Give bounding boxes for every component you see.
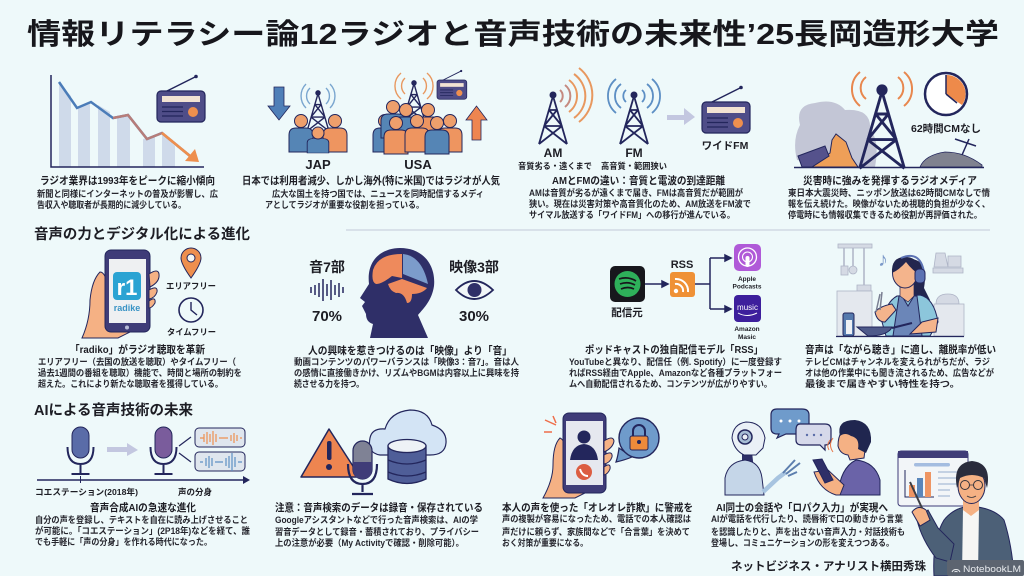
label: area free: エリアフリー xyxy=(166,281,216,291)
body text xyxy=(805,356,994,389)
arrow: up xyxy=(466,106,487,140)
body text: アとしてラジオが重要な役割を担っている。 xyxy=(265,199,424,210)
body text: 報を伝え続けた。映像がないため視聴的負担が少なく、 xyxy=(788,198,990,209)
body text: AIが電話を代行したり、読唇術で口の動きから言葉 xyxy=(711,513,903,524)
body text: テレビCMはチャンネルを変えられがちだが、ラジ xyxy=(805,356,990,367)
body text: オは他の作業中にも聞き流されるため、広告などが xyxy=(805,367,994,378)
icon: location pin xyxy=(181,248,201,278)
line chart: industry decline xyxy=(51,75,204,167)
icon: phone with hand xyxy=(82,250,159,338)
icon: phone with hand: radike xyxy=(114,303,140,313)
label: Apple Podcasts xyxy=(733,276,762,290)
body text: サイマル放送する「ワイドFM」への移行が進んでいる。 xyxy=(529,209,735,220)
panel: radio decline xyxy=(37,75,218,210)
icon: AM tower xyxy=(539,68,592,144)
illustration: head with brain xyxy=(360,248,434,338)
icon: music note: ♪ xyxy=(878,249,888,271)
body text: 続させる力を持つ。 xyxy=(294,378,364,389)
panel: AI conversation xyxy=(711,409,905,548)
caption: FM: 高音質・範囲狭い xyxy=(601,161,667,171)
body text xyxy=(38,356,242,389)
chart board xyxy=(898,451,968,506)
icon: tower with waves xyxy=(852,72,912,168)
body text: AMは音質が劣るが遠くまで届き、FMは高音質だが範囲が xyxy=(529,187,743,198)
ground line xyxy=(836,336,964,338)
body text xyxy=(711,513,905,548)
icon: microphone blue xyxy=(68,427,94,474)
body text: おく対策が重要になる。 xyxy=(502,537,588,548)
body text: 最後まで届きやすい特性を持つ。 xyxy=(805,378,960,389)
heading: 人の興味を惹きつけるのは「映像」より「音」 xyxy=(308,344,512,357)
icon: Amazon Music: music xyxy=(737,303,758,312)
label: sound 7: 音7部 xyxy=(309,259,345,275)
body text: 東日本大震災時、ニッポン放送は62時間CMなしで情 xyxy=(788,187,990,198)
icon: lock bubble xyxy=(616,418,659,462)
body text: 習音データとして録音・蓄積されており、プライバシー xyxy=(275,526,479,537)
icon: database xyxy=(388,440,426,484)
body text: 声の複製が容易になったため、電話での本人確認は xyxy=(502,513,691,524)
icon: phone with hand: r1 xyxy=(117,275,137,300)
icon: warning triangle xyxy=(301,429,360,477)
icon: waveform xyxy=(311,279,343,301)
label: time free: タイムフリー xyxy=(167,327,216,337)
presenter caption: ネットビジネス・アナリスト横田秀珠 xyxy=(731,559,926,573)
label: JAP: JAP xyxy=(305,157,331,172)
icon: FM tower xyxy=(608,79,660,144)
label: wide FM: ワイドFM xyxy=(702,140,749,152)
title: 情報リテラシー論12ラジオと音声技術の未来性’25長岡造形大学 xyxy=(27,18,999,51)
arrow: down xyxy=(268,87,290,120)
icon: orange waveform xyxy=(195,428,245,447)
panel: Japan vs USA xyxy=(242,70,500,210)
ground line xyxy=(794,166,984,168)
label: USA: USA xyxy=(404,157,432,172)
label: voice avatar: 声の分身 xyxy=(178,487,212,497)
arrows: distribution flow xyxy=(645,255,731,312)
icon: phone with hand xyxy=(543,413,614,498)
body text: 超えた。これにより新たな聴取者を獲得している。 xyxy=(38,378,223,389)
arrow xyxy=(667,108,695,125)
illustration: presenter with board xyxy=(898,451,1014,576)
body text: 過去1週間の番組を聴取）機能で、時間と場所の制約を xyxy=(38,367,242,378)
badge: NotebookLM: NotebookLM xyxy=(963,564,1021,575)
body text: 声だけに頼らず、家族間などで「合言葉」を決めて xyxy=(502,526,690,537)
body text: 停電時にも情報収集できるため役割が再評価された。 xyxy=(788,209,982,220)
body text xyxy=(294,356,519,389)
icon: clock xyxy=(925,73,967,115)
heading: 「radiko」がラジオ聴取を革新 xyxy=(70,343,205,356)
label: 30%: 30% xyxy=(459,308,489,325)
body text: YouTubeと異なり、配信任（例. Spotify）に一度登録す xyxy=(569,356,782,367)
heading: 本人の声を使った「オレオレ詐欺」に警戒を xyxy=(502,501,693,514)
body text: ムへ自動配信されるため、コンテンツが広がりやすい。 xyxy=(569,378,772,389)
body text xyxy=(569,356,782,389)
icon: radio xyxy=(702,86,750,133)
body text: 狭い。現在は災害対策や高音質化のため、AM放送をFM波で xyxy=(529,198,751,209)
illustration: smoke xyxy=(795,102,877,167)
icon: eye xyxy=(456,281,493,299)
body text: ればRSS経由でApple、Amazonなど各種プラットフォー xyxy=(569,367,782,378)
body text: Googleアシスタントなどで行った音声検索は、AIの学 xyxy=(275,514,478,525)
body text: エリアフリー（去国の放送を聴取）やタイムフリー（ xyxy=(38,356,236,367)
icon: Amazon Music xyxy=(734,295,761,322)
icon: Apple Podcasts xyxy=(734,244,761,271)
icon: microphone purple xyxy=(150,427,176,474)
heading: ポッドキャストの独自配信モデル「RSS」 xyxy=(585,343,763,356)
label: AM: AM xyxy=(544,146,562,160)
icon: clock xyxy=(179,298,203,322)
panel: AM and FM xyxy=(518,68,751,220)
label: image 3: 映像3部 xyxy=(449,259,499,275)
arrows: branch xyxy=(179,437,191,462)
icon: Spotify xyxy=(610,266,645,302)
panel: sound vs image xyxy=(294,248,519,389)
heading: 災害時に強みを発揮するラジオメディア xyxy=(803,174,977,187)
divider xyxy=(346,229,990,231)
heading: 注意：音声検索のデータは録音・保存されている xyxy=(275,501,483,514)
body text xyxy=(502,513,691,548)
label: FM: FM xyxy=(625,146,643,160)
heading: ラジオ業界は1993年をピークに縮小傾向 xyxy=(40,174,215,187)
heading: 音声は「ながら聴き」に適し、離脱率が低い xyxy=(805,343,996,356)
label: Amazon Music xyxy=(734,326,760,341)
icon: blue waveform xyxy=(195,452,245,471)
icon: microphone xyxy=(348,441,377,494)
illustration: kitchen background xyxy=(837,244,964,336)
panel: listening while cooking xyxy=(805,244,996,389)
label: 70%: 70% xyxy=(312,308,342,325)
timeline xyxy=(37,476,250,484)
label: Amazon Music: Amazon xyxy=(734,326,760,333)
body text xyxy=(529,187,751,220)
illustration: woman cooking xyxy=(843,256,938,336)
heading: AI同士の会話や「ロパク入力」が実現へ xyxy=(716,501,888,514)
body text: 広大な国土を持つ国では、ニュースを同時配信するメディ xyxy=(272,188,484,199)
body text: でも手軽に「声の分身」を作れる時代になった。 xyxy=(35,536,212,547)
label: source: 配信元 xyxy=(611,306,643,319)
body text: 動画コンテンツのパワーバランスは「映像3：音7」。音は人 xyxy=(294,356,519,367)
label: Apple Podcasts: Podcasts xyxy=(733,284,762,290)
label: 62 hours: 62時間CMなし xyxy=(911,122,981,135)
label: RSS: RSS xyxy=(671,259,693,271)
body text: が可能に。「コエステーション」(2P18年)などを経て、誰 xyxy=(35,525,250,536)
body text xyxy=(788,187,990,220)
body text: 新聞と同様にインターネットの普及が影響し、広 xyxy=(37,188,218,199)
label: Apple Podcasts: Apple xyxy=(738,276,756,283)
icon: radio xyxy=(157,75,205,122)
icon: RSS xyxy=(670,272,695,297)
body text: 登場し、コミュニケーションの形を変えつつある。 xyxy=(711,537,894,548)
body text: を認識したりと、声を出さない音声入力・対話技術も xyxy=(711,526,905,537)
panel: speech synthesis xyxy=(35,427,250,547)
heading: 日本では利用者減少、しかし海外(特に米国)ではラジオが人気 xyxy=(242,174,500,187)
icon: JAP tower and people xyxy=(289,84,347,153)
label: Amazon Music: Masic xyxy=(738,334,756,341)
panel: voice fraud xyxy=(502,413,693,548)
panel: voice search data xyxy=(275,410,483,548)
icon: alert marks xyxy=(544,416,556,432)
panel: RSS podcast xyxy=(569,244,782,389)
illustration: rubble xyxy=(798,134,982,167)
illustration: man with phone xyxy=(813,420,880,495)
illustration: robot xyxy=(725,422,800,495)
panel: disaster resilience xyxy=(788,72,990,220)
body text: 告収入や聴取者が長期的に減少している。 xyxy=(37,199,186,210)
body text xyxy=(37,188,218,210)
heading: 音声合成AIの急速な進化 xyxy=(90,501,196,514)
body text xyxy=(265,188,484,210)
body text: の感情に直接働きかけ、リズムやBGMは内容以上に興味を持 xyxy=(294,367,519,378)
body text xyxy=(275,514,479,548)
caption: AM: 音質劣る・遠くまで xyxy=(518,161,592,171)
section heading: audio and digital: 音声の力とデジタル化による進化 xyxy=(34,225,250,243)
icon: speech bubbles xyxy=(771,409,831,450)
body text xyxy=(35,514,250,547)
section heading: AI: AIによる音声技術の未来 xyxy=(34,401,193,419)
label: Coestation: コエステーション(2018年) xyxy=(35,487,138,497)
icon: cloud xyxy=(369,410,446,455)
panel: radiko xyxy=(38,248,242,389)
heading: AMとFMの違い：音質と電波の到達距離 xyxy=(552,174,725,187)
man xyxy=(910,461,1014,576)
arrow xyxy=(107,443,138,456)
body text: 上の注意が必要（My Activityで確認・削除可能）。 xyxy=(275,537,464,548)
icon: USA tower, crowd and radio xyxy=(373,70,467,154)
body text: 自分の声を登録し、テキストを自在に読み上げさせること xyxy=(35,514,248,525)
badge: NotebookLM xyxy=(947,560,1024,576)
